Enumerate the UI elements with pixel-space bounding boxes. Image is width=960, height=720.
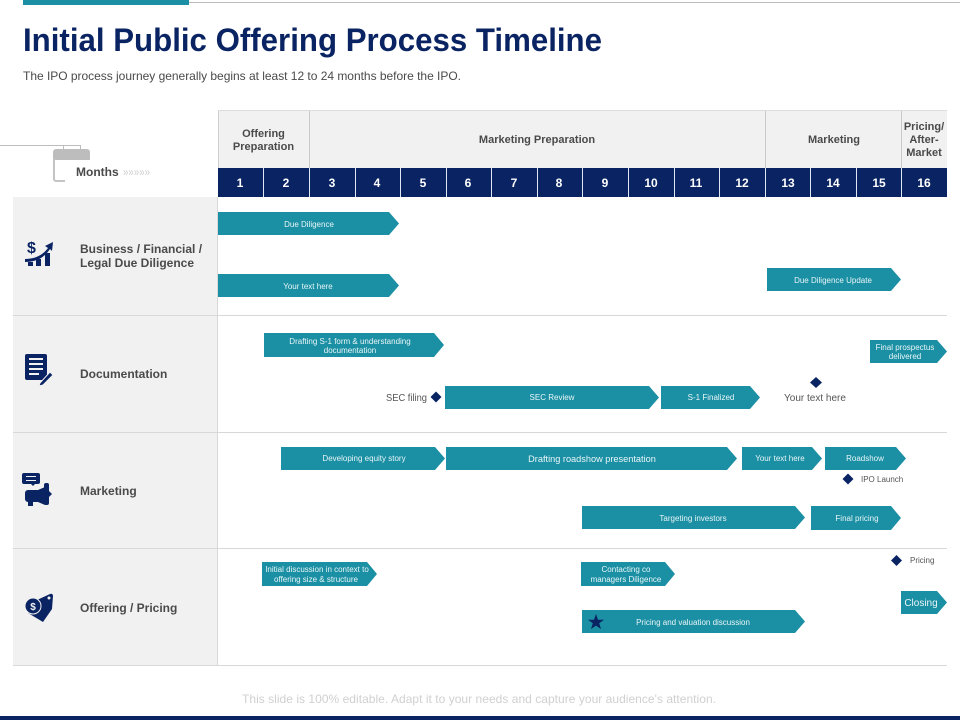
bar: targeting investors: Targeting investors (659, 514, 727, 523)
bar: due diligence: Due Diligence (284, 220, 334, 229)
icon: price tag with dollar (25, 594, 53, 622)
bar: s-1 finalized (661, 386, 760, 409)
row label: Business / Financial / (80, 242, 203, 256)
row dividers (13, 315, 947, 666)
month number row: 8 (556, 176, 563, 190)
bar: due diligence update: Due Diligence Update (794, 276, 872, 285)
month number row (218, 168, 947, 197)
months label with calendar icon: Months (76, 165, 119, 179)
month number row: 3 (329, 176, 336, 190)
bar: drafting roadshow presentation (446, 447, 737, 470)
bar: roadshow (825, 447, 906, 470)
bar: drafting s-1 form: documentation (324, 346, 376, 355)
bar: your text here marketing (742, 447, 822, 470)
milestone: sec filing (386, 392, 442, 404)
bar: initial discussion: offering size & structure (274, 575, 358, 584)
months label with calendar icon (0, 145, 150, 181)
bar: drafting s-1 form: Drafting S-1 form & understanding (289, 337, 411, 346)
bar: initial discussion: Initial discussion in context to (265, 565, 369, 574)
bottom bar (0, 716, 960, 720)
icon: star (588, 614, 604, 629)
month number row: 14 (826, 176, 840, 190)
bar: your text here (218, 274, 399, 297)
bar: drafting s-1 form (264, 333, 444, 357)
bar: initial discussion (262, 562, 377, 586)
bar: final pricing: Final pricing (835, 514, 879, 523)
subtitle: The IPO process journey generally begins at least 12 to 24 months before the IPO. (23, 69, 461, 83)
timeline phase header: Market (906, 147, 942, 159)
milestone: your text here (784, 377, 846, 404)
month number row: 12 (735, 176, 749, 190)
bar: drafting roadshow presentation: Drafting roadshow presentation (528, 454, 656, 464)
bar: due diligence update (767, 268, 901, 291)
bar: pricing and valuation discussion (582, 610, 805, 633)
row: documentation (25, 354, 167, 386)
milestone: pricing: Pricing (910, 556, 934, 565)
bar: developing equity story: Developing equity story (322, 454, 406, 463)
icon: money growth chart (25, 240, 53, 266)
bar: closing (901, 591, 947, 614)
month number row: 2 (283, 176, 290, 190)
timeline phase header (218, 110, 947, 168)
bar: developing equity story (281, 447, 445, 470)
months label with calendar icon: »»»»» (123, 165, 150, 179)
timeline phase header: Marketing (808, 134, 860, 146)
bar: contacting co managers: Contacting co (602, 565, 651, 574)
bar: final prospectus: delivered (889, 352, 921, 361)
month number row: 16 (917, 176, 931, 190)
milestone: ipo launch: IPO Launch (861, 475, 903, 484)
bar: final prospectus (870, 340, 947, 363)
month number row: 4 (374, 176, 381, 190)
bar: targeting investors (582, 506, 805, 529)
milestone: your text here: Your text here (784, 393, 846, 404)
month number row: 9 (602, 176, 609, 190)
row: business financial legal due diligence (25, 240, 203, 270)
bar: your text here marketing: Your text here (755, 454, 805, 463)
bar: pricing and valuation discussion: Pricing and valuation discussion (636, 618, 750, 627)
bar: your text here: Your text here (283, 282, 333, 291)
timeline phase header: Offering (242, 128, 285, 140)
timeline phase header: Pricing/ (904, 121, 944, 133)
row label: Legal Due Diligence (80, 256, 194, 270)
icon: money growth chart: $ (27, 240, 36, 257)
row label: Offering / Pricing (80, 601, 177, 615)
row: marketing (22, 473, 137, 506)
bar: contacting co managers: managers Diligence (591, 575, 662, 584)
bar: closing: Closing (904, 598, 938, 609)
month number row: 13 (781, 176, 795, 190)
milestone: pricing (891, 555, 934, 566)
bar: due diligence (218, 212, 399, 235)
month number row: 15 (872, 176, 886, 190)
milestone: sec filing: SEC filing (386, 393, 427, 404)
timeline phase header: Marketing Preparation (479, 134, 595, 146)
row label: Marketing (80, 484, 137, 498)
icon: megaphone and speech bubble (22, 473, 52, 506)
month number row: 10 (644, 176, 658, 190)
icon: price tag with dollar: $ (30, 602, 36, 613)
icon: document and pencil (25, 354, 53, 386)
bar: roadshow: Roadshow (846, 454, 884, 463)
month number row: 5 (420, 176, 427, 190)
bar: sec review (445, 386, 659, 409)
milestone: ipo launch (842, 474, 903, 484)
timeline phase header: After- (909, 134, 939, 146)
bar: sec review: SEC Review (530, 393, 575, 402)
row label: Documentation (80, 367, 167, 381)
row: offering pricing (25, 594, 177, 622)
month number row: 7 (511, 176, 518, 190)
footer note: This slide is 100% editable. Adapt it to your needs and capture your audience's attention. (242, 692, 716, 706)
title: Initial Public Offering Process Timeline (23, 22, 602, 58)
timeline phase header: Preparation (233, 141, 294, 153)
month number row: 11 (690, 176, 703, 190)
month number row: 6 (465, 176, 472, 190)
bar: contacting co managers (581, 562, 675, 586)
bar: s-1 finalized: S-1 Finalized (688, 393, 734, 402)
top accent bar (23, 0, 960, 5)
bar: final prospectus: Final prospectus (876, 343, 934, 352)
bar: final pricing (811, 506, 901, 530)
month number row: 1 (237, 176, 244, 190)
left category panel (13, 197, 218, 665)
